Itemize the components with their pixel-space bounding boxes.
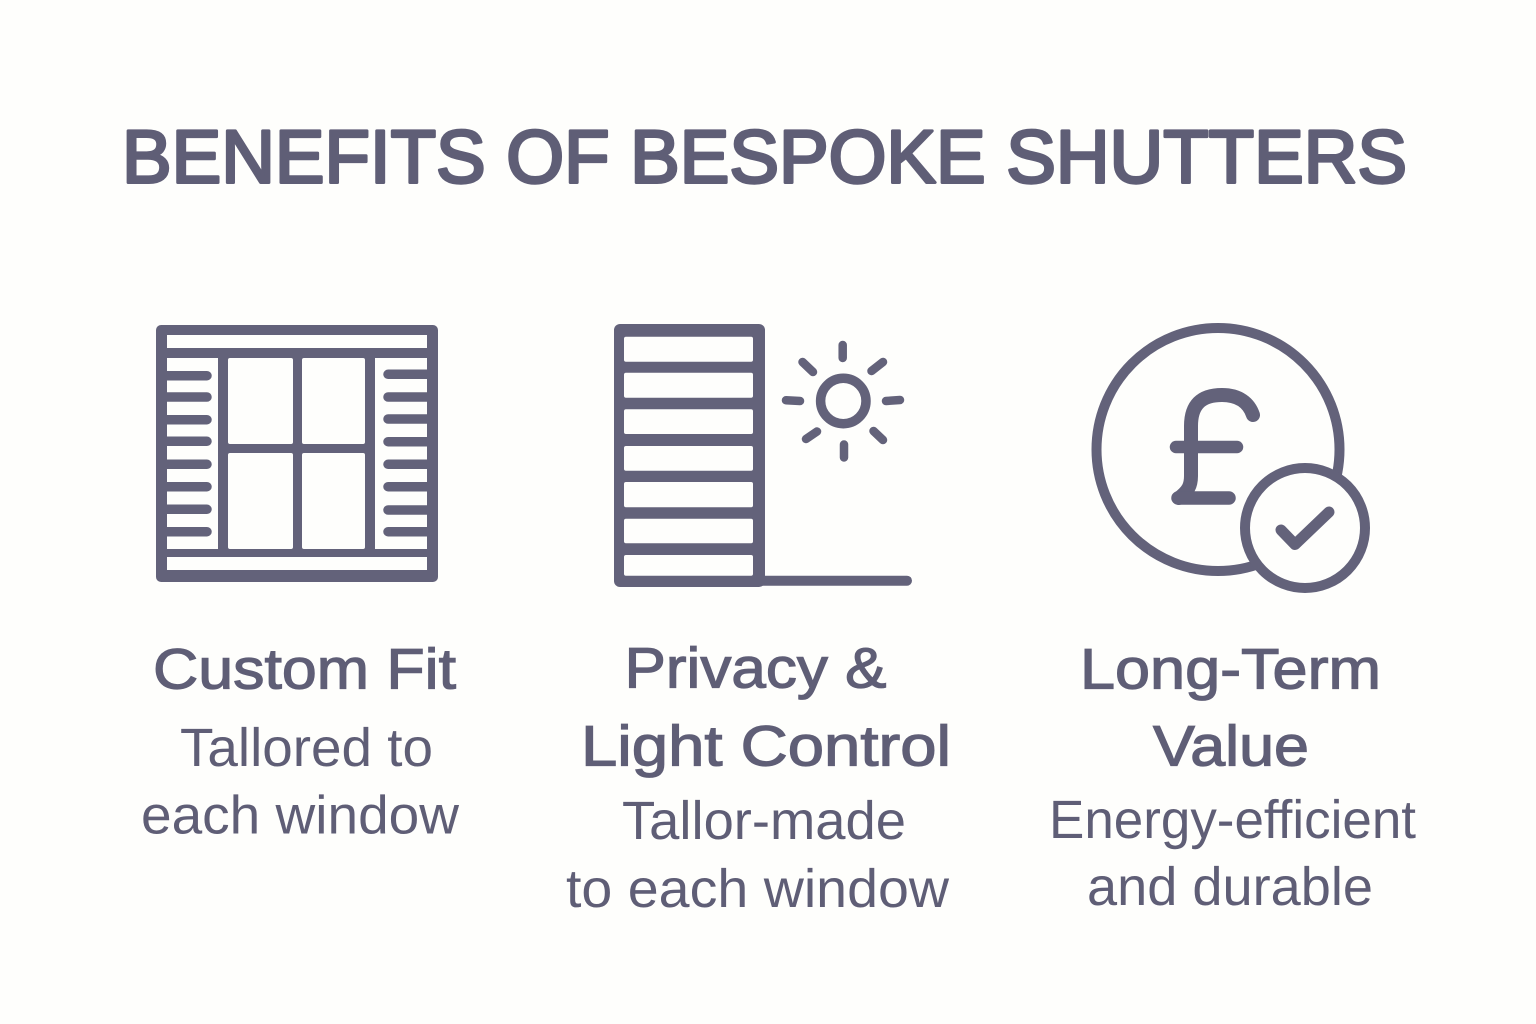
text: to each window: to each window [566,859,950,919]
text: tailor-made: Tallor-made [622,791,906,851]
text: energy-efficient: Energy-efficient [1049,790,1416,850]
heading: light control: Light Control [581,714,951,778]
icon: shutter and sun [614,324,907,587]
text: and durable: and durable [1087,857,1373,917]
icon: sun [786,345,900,458]
heading: long-term: Long-Term [1080,638,1381,702]
icon: pound sign [1176,395,1253,498]
title: BENEFITS OF BESPOKE SHUTTERS [122,114,1407,198]
panel: long-term value [1049,328,1416,917]
panel: privacy and light control [566,324,951,919]
heading: custom fit: Custom Fit [153,638,456,702]
text: each window: each window [141,786,460,846]
icon: check badge [1245,468,1365,588]
icon: pound coin with check badge [1096,328,1365,588]
heading: privacy and: Privacy & [624,636,886,700]
text: tailored to: Tallored to [180,718,433,778]
icon: window with shutters [156,325,438,582]
heading: value: Value [1153,714,1309,778]
panel: custom fit [141,325,460,846]
